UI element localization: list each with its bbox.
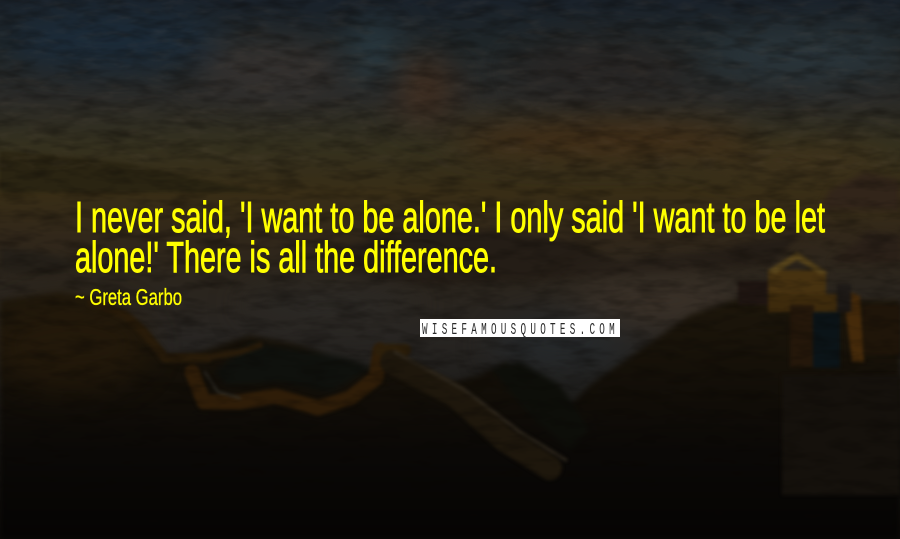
- watermark background: [420, 319, 620, 337]
- distant mountains: [0, 172, 900, 285]
- sea of fog: [240, 276, 750, 373]
- tower rear brick section: [738, 281, 768, 305]
- warm glow on left hillside: [0, 300, 150, 390]
- tower shaded section: [790, 305, 814, 367]
- quote line 2: alone!' There is all the difference.: [75, 233, 497, 282]
- tower house walls: [768, 270, 826, 294]
- sky cloud patches: [0, 10, 900, 174]
- distant ridge upper left: [0, 151, 270, 192]
- watermark badge: [420, 319, 620, 339]
- cloud streak texture: [0, 0, 900, 170]
- tower orange pillar: [846, 292, 864, 362]
- foreground hills: [0, 292, 900, 539]
- tower battlement: [768, 294, 838, 312]
- author attribution: ~ Greta Garbo: [75, 284, 182, 310]
- tower house roof: [767, 252, 828, 274]
- watchtower on right hill: [738, 252, 900, 495]
- quote text: [75, 193, 825, 282]
- tower dark blue door: [813, 312, 840, 368]
- Great Wall winding: [92, 302, 566, 468]
- tower base wall: [782, 375, 900, 495]
- watermark text: WISEFAMOUSQUOTES.COM: [422, 321, 619, 339]
